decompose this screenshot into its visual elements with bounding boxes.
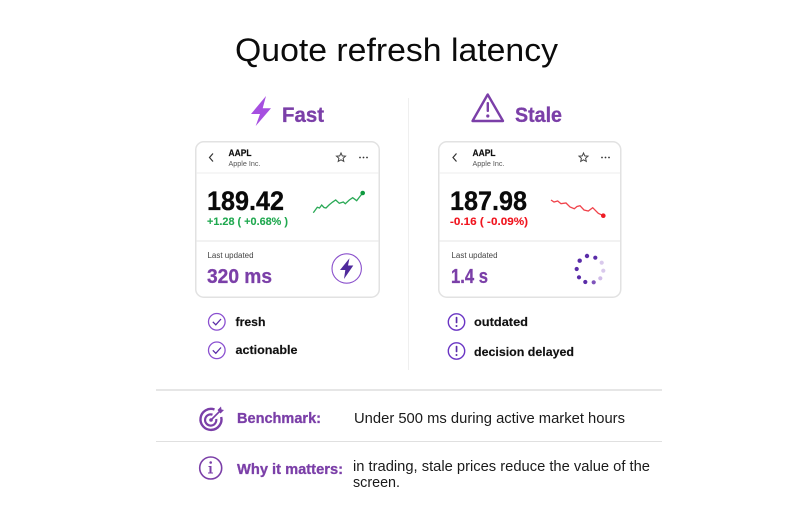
stale quote card (439, 142, 621, 297)
fast label: Fast (282, 104, 324, 127)
ticker: AAPL (228, 148, 252, 158)
stale heading (472, 94, 562, 127)
fast heading (251, 96, 324, 127)
decision delayed: decision delayed (474, 345, 574, 359)
why it matters text (353, 458, 650, 491)
why it matters text: screen. (353, 474, 400, 491)
back chevron (453, 154, 456, 162)
fresh: fresh (236, 315, 266, 329)
stale attributes list (448, 314, 574, 359)
title: Quote refresh latency (235, 32, 558, 68)
back chevron (210, 154, 213, 162)
icon: loading spinner (575, 254, 605, 284)
latency value: 320 ms (207, 266, 272, 288)
why it matters label: Why it matters: (237, 461, 343, 478)
actionable: actionable (236, 343, 298, 357)
outdated: outdated (474, 315, 528, 329)
panel: fast (196, 96, 379, 359)
panel: stale (439, 94, 621, 359)
icon: lightning bolt (251, 96, 271, 126)
company name: Apple Inc. (472, 161, 505, 168)
icon: star (336, 153, 346, 161)
last updated label: Last updated (452, 251, 498, 260)
price change: -0.16 ( -0.09%) (450, 216, 528, 228)
sparkline up (313, 191, 365, 213)
benchmark row (200, 406, 625, 430)
sparkline down (551, 200, 606, 218)
stale label: Stale (515, 104, 562, 127)
latency value: 1.4 s (451, 266, 488, 288)
why it matters text: in trading, stale prices reduce the value of the (353, 458, 650, 475)
fast quote card (196, 142, 379, 297)
icon: info (200, 457, 222, 479)
icon: warning triangle (472, 94, 503, 121)
icon: target (200, 406, 224, 430)
icon: check (208, 342, 225, 359)
company name: Apple Inc. (228, 161, 261, 168)
fast attributes list (208, 314, 298, 359)
price change: +1.28 ( +0.68% ) (207, 216, 288, 228)
icon: bolt in circle (332, 254, 361, 283)
icon: exclamation (448, 314, 465, 330)
icon: exclamation (448, 343, 465, 359)
icon: check (208, 314, 225, 330)
why it matters row (200, 457, 650, 491)
benchmark text: Under 500 ms during active market hours (354, 410, 625, 427)
icon: more dots (359, 157, 368, 158)
price: 187.98 (450, 186, 527, 216)
icon: more dots (601, 157, 610, 158)
ticker: AAPL (472, 148, 496, 158)
icon: star (579, 153, 588, 161)
card outline (196, 142, 379, 297)
benchmark label: Benchmark: (237, 410, 321, 427)
price: 189.42 (207, 186, 284, 216)
card outline (439, 142, 621, 297)
last updated label: Last updated (208, 251, 254, 260)
